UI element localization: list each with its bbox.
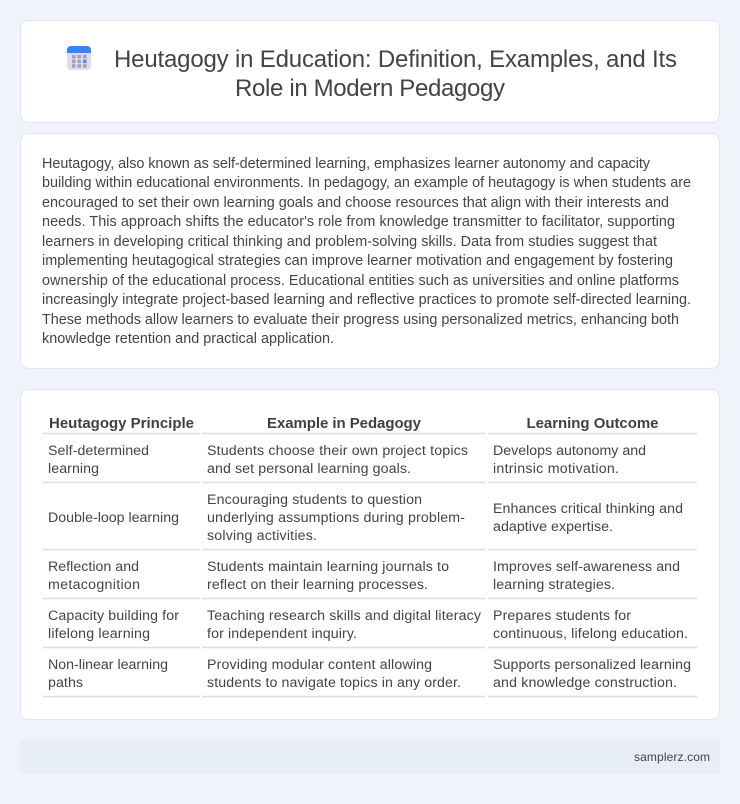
title: Role in Modern Pedagogy <box>235 75 505 102</box>
panel: introduction text: knowledge retention and practical application. <box>42 331 334 347</box>
table header: Heutagogy Principle <box>49 415 194 432</box>
row: self-determined learning: Students choose their own project topics <box>207 443 468 459</box>
table header: Example in Pedagogy <box>267 415 422 432</box>
row: non-linear learning paths: paths <box>48 675 83 691</box>
panel: introduction text: building within educational environments. In pedagogy, an example of heutagogy is when students are <box>42 175 691 191</box>
row: reflection and metacognition: Improves self-awareness and <box>493 559 680 575</box>
panel: introduction text: ownership of the educational process. Educational entities such as universities and online platforms <box>42 273 679 289</box>
row: double-loop learning: adaptive expertise. <box>493 519 613 535</box>
row: double-loop learning: underlying assumptions during problem- <box>207 510 465 526</box>
row: capacity building: Capacity building for <box>48 608 179 624</box>
footer: samplerz.com <box>634 750 710 764</box>
table header <box>43 415 697 434</box>
row: reflection and metacognition: metacognition <box>48 577 140 593</box>
row: capacity building <box>43 608 697 648</box>
panel: introduction text: needs. This approach shifts the educator's role from knowledge transmitter to facilitator, supporting <box>42 214 675 230</box>
panel: title card <box>20 20 720 122</box>
row: reflection and metacognition: learning strategies. <box>493 577 615 593</box>
row: non-linear learning paths: students to navigate topics in any order. <box>207 675 461 691</box>
row: double-loop learning <box>43 492 697 550</box>
row: reflection and metacognition <box>43 559 697 598</box>
row: non-linear learning paths <box>43 657 697 696</box>
title: Heutagogy in Education: Definition, Examples, and Its <box>114 46 677 73</box>
row: self-determined learning: Develops autonomy and <box>493 443 646 459</box>
row: self-determined learning: learning <box>48 461 99 477</box>
row: double-loop learning: Enhances critical thinking and <box>493 501 683 517</box>
row: self-determined learning <box>43 443 697 482</box>
panel: principles table <box>20 390 720 720</box>
footer <box>20 740 720 774</box>
row: double-loop learning: Double-loop learning <box>48 510 179 526</box>
row: reflection and metacognition: reflect on their learning processes. <box>207 577 428 593</box>
row: non-linear learning paths: Supports personalized learning <box>493 657 691 673</box>
row: capacity building: continuous, lifelong education. <box>493 626 688 642</box>
row: double-loop learning: solving activities. <box>207 528 317 544</box>
row: non-linear learning paths: Providing modular content allowing <box>207 657 432 673</box>
panel: introduction text: encouraged to set their own learning goals and choose resources that align with their interests and <box>42 195 669 211</box>
row: capacity building: lifelong learning <box>48 626 150 642</box>
row: self-determined learning: and set personal learning goals. <box>207 461 411 477</box>
panel: introduction text: Heutagogy, also known as self-determined learning, emphasizes learner autonomy and capacity <box>42 156 651 172</box>
row: self-determined learning: Self-determined <box>48 443 149 459</box>
row: double-loop learning: Encouraging students to question <box>207 492 422 508</box>
panel: introduction text: learners in developing critical thinking and problem-solving skills. Data from studies suggest that <box>42 234 657 250</box>
panel: introduction text: These methods allow learners to evaluate their progress using personalized metrics, enhancing both <box>42 312 679 328</box>
table header: Learning Outcome <box>526 415 658 432</box>
panel: introduction text <box>20 134 720 368</box>
title <box>114 46 677 102</box>
row: non-linear learning paths: and knowledge construction. <box>493 675 677 691</box>
row: self-determined learning: intrinsic motivation. <box>493 461 619 477</box>
row: capacity building: Prepares students for <box>493 608 631 624</box>
panel: introduction text: implementing heutagogical strategies can improve learner motivation and engagement by fostering <box>42 253 673 269</box>
panel: introduction text: increasingly integrate project-based learning and reflective practices to promote self-directed learning. <box>42 292 691 308</box>
row: non-linear learning paths: Non-linear learning <box>48 657 168 673</box>
row: capacity building: Teaching research skills and digital literacy <box>207 608 482 624</box>
icon: calendar <box>67 46 91 70</box>
row: reflection and metacognition: Reflection and <box>48 559 139 575</box>
row: capacity building: for independent inquiry. <box>207 626 357 642</box>
row: reflection and metacognition: Students maintain learning journals to <box>207 559 449 575</box>
